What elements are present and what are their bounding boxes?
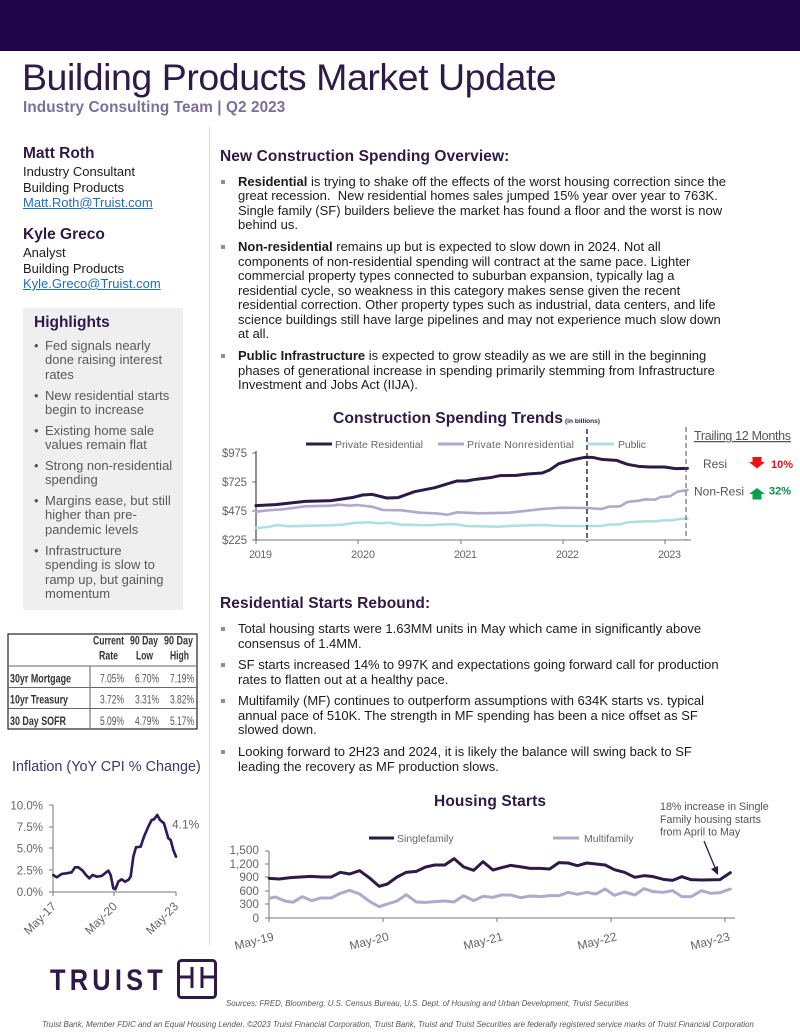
trailing 12 months callout: Trailing 12 Months bbox=[694, 429, 791, 443]
highlights list: Infrastructure bbox=[45, 543, 122, 558]
callout: 18% increase bbox=[660, 801, 769, 838]
highlights list: values remain flat bbox=[45, 437, 147, 452]
housing starts chart: 900 bbox=[239, 870, 259, 884]
logo wordmark: TRUIST bbox=[50, 964, 167, 997]
text: non-residential bullet: Non-residential remains up but is expected to slow down in 2024. Not all bbox=[238, 239, 661, 254]
text: multifamily bbox=[221, 693, 704, 737]
rates table: 10yr Treasury bbox=[10, 692, 68, 706]
rates table: 30yr Mortgage bbox=[10, 672, 71, 686]
trailing 12 months callout bbox=[694, 429, 793, 500]
highlights list: ramp up, but gaining bbox=[45, 572, 164, 587]
chart title: (in billions) bbox=[565, 419, 600, 425]
text: residential bullet bbox=[221, 174, 726, 232]
legend: Public bbox=[618, 439, 646, 451]
section heading: new construction spending: New Construction Spending Overview: bbox=[220, 148, 509, 165]
highlights list: done raising interest bbox=[45, 352, 162, 367]
rates table: 3.82% bbox=[170, 692, 194, 706]
inflation line chart: 7.5% bbox=[17, 822, 43, 834]
highlights list: • bbox=[34, 493, 39, 508]
trailing 12 months callout: Non-Resi bbox=[694, 484, 744, 498]
housing starts chart: 0 bbox=[252, 911, 259, 925]
trailing 12 months callout: 32% bbox=[769, 486, 791, 498]
chart title: Housing Starts bbox=[434, 793, 546, 810]
rates table: 30 Day SOFR bbox=[10, 714, 66, 728]
construction spending chart: $225 bbox=[222, 535, 247, 547]
panel: highlights bbox=[23, 308, 183, 610]
chart title: Construction Spending Trends bbox=[333, 410, 563, 427]
housing starts chart: May-21 bbox=[462, 929, 504, 953]
contact: Kyle Greco: Building Products bbox=[23, 260, 124, 276]
highlights list bbox=[34, 338, 172, 601]
icon: Truist mark bbox=[178, 960, 216, 998]
highlights list: New residential starts bbox=[45, 388, 169, 402]
rates table: 6.70% bbox=[135, 672, 159, 686]
highlights list: momentum bbox=[45, 586, 110, 601]
rates table: 90 Day bbox=[130, 634, 158, 648]
text: looking forward bbox=[221, 744, 692, 774]
contact: Matt Roth: Industry Consultant bbox=[23, 164, 135, 178]
highlights heading: Highlights bbox=[34, 314, 110, 331]
rates table: Low bbox=[136, 648, 153, 662]
highlights list: spending bbox=[45, 472, 98, 487]
text: public infrastructure bullet: Public Infrastructure is expected to grow steadily as we are still in the beginning bbox=[238, 348, 706, 363]
construction spending chart bbox=[222, 410, 691, 561]
inflation line chart: 4.1% bbox=[172, 818, 200, 832]
legal footer: Truist Bank, Member FDIC and an Equal Housing Lender. ©2023 Truist Financial Corporation, Truist Bank, Truist and Truist Securities are federally registered service marks of Truist Financial Corporation bbox=[42, 1020, 754, 1029]
contact: Matt Roth: Building Products bbox=[23, 180, 124, 194]
legend: Multifamily bbox=[584, 833, 634, 845]
callout: 18% increase: from April to May bbox=[660, 826, 741, 838]
legend: Private Residential bbox=[335, 439, 423, 451]
top banner bbox=[0, 0, 800, 51]
sources note: Sources: FRED, Bloomberg, U.S. Census Bureau, U.S. Dept. of Housing and Urban Development, Truist Securities bbox=[226, 999, 628, 1008]
highlights list: begin to increase bbox=[45, 402, 144, 417]
housing starts chart: 1,500 bbox=[229, 843, 259, 857]
text: multifamily: slowed down. bbox=[238, 722, 317, 737]
construction spending chart: 2021 bbox=[454, 549, 477, 561]
contact: Matt Roth: Matt Roth bbox=[23, 145, 94, 162]
series bbox=[256, 457, 687, 528]
text: total housing starts: Total housing starts were 1.63MM units in May which came in significantly above bbox=[238, 621, 701, 636]
text: looking forward: Looking forward to 2H23 and 2024, it is likely the balance will swing back to SF bbox=[238, 744, 692, 759]
text: total housing starts: consensus of 1.4MM. bbox=[238, 636, 362, 650]
text: non-residential bullet: residential cycle, so weakness in this category makes sense given the recent bbox=[238, 282, 680, 298]
text: residential bullet: Single family (SF) builders believe the market has found a floor and the worst is now bbox=[238, 202, 722, 218]
legend: Singlefamily bbox=[397, 833, 454, 845]
construction spending chart: 2023 bbox=[658, 549, 681, 561]
text: non-residential bullet: residential correction. Other property types such as industrial, data centers, and life bbox=[238, 297, 716, 312]
trailing 12 months callout: 10% bbox=[771, 459, 793, 471]
highlights list: Fed signals nearly bbox=[45, 338, 150, 353]
highlights list: pandemic levels bbox=[45, 522, 138, 537]
inflation line chart: 2.5% bbox=[17, 866, 43, 878]
highlights list: • bbox=[34, 422, 39, 438]
icon: green up arrow bbox=[749, 488, 765, 500]
inflation line chart bbox=[10, 800, 200, 937]
construction spending chart: 2020 bbox=[351, 549, 375, 561]
arrow bbox=[704, 841, 718, 875]
icon: red down arrow bbox=[749, 457, 765, 468]
rates table: 3.31% bbox=[135, 692, 159, 706]
highlights list: Existing home sale bbox=[45, 422, 154, 438]
construction spending chart: 2019 bbox=[249, 549, 272, 561]
rates table bbox=[7, 633, 198, 730]
highlights list: rates bbox=[45, 367, 74, 382]
subtitle: Industry Consulting Team | Q2 2023 bbox=[23, 99, 285, 116]
highlights list: Margins ease, but still bbox=[45, 493, 171, 508]
column divider bbox=[209, 127, 210, 945]
rates table: Rate bbox=[99, 648, 118, 662]
text: multifamily: annual pace of 510K. The strength in MF spending has been a nice offset as SF bbox=[238, 708, 698, 722]
housing starts chart: May-22 bbox=[576, 929, 618, 953]
text: residential bullet: Residential is trying to shake off the effects of the worst housing correction since the bbox=[238, 174, 726, 188]
highlights list: • bbox=[34, 338, 39, 353]
rates table: 5.17% bbox=[170, 714, 194, 728]
rates table: 3.72% bbox=[100, 692, 124, 706]
highlights list: • bbox=[34, 543, 39, 558]
housing starts chart: May-20 bbox=[348, 929, 390, 953]
text: looking forward: leading the recovery as MF production slows. bbox=[238, 758, 499, 774]
rates table: 90 Day bbox=[164, 634, 193, 648]
text: multifamily: Multifamily (MF) continues to outperform assumptions with 634K starts vs. typical bbox=[238, 693, 704, 708]
legend bbox=[369, 833, 634, 845]
inflation chart title: Inflation (YoY CPI % Change) bbox=[12, 759, 201, 775]
text: SF starts bbox=[221, 657, 719, 686]
contact: Matt Roth: Matt.Roth@Truist.com bbox=[23, 195, 153, 210]
construction spending chart: $475 bbox=[222, 506, 247, 518]
section heading: residential starts: Residential Starts Rebound: bbox=[220, 595, 430, 612]
inflation line chart: May-17 bbox=[21, 899, 59, 937]
housing starts chart: May-23 bbox=[689, 929, 731, 953]
inflation line chart: 5.0% bbox=[17, 844, 43, 856]
contact: Kyle Greco: Kyle Greco bbox=[23, 226, 105, 243]
text: total housing starts bbox=[221, 621, 701, 650]
rates table: 7.05% bbox=[100, 672, 124, 686]
inflation line chart: May-20 bbox=[82, 899, 120, 937]
series bbox=[269, 859, 730, 907]
text: non-residential bullet: components of non-residential spending will contract at the same pace. Lighter bbox=[238, 254, 690, 268]
inflation line chart: 0.0% bbox=[17, 887, 43, 899]
inflation line chart: 10.0% bbox=[10, 800, 43, 812]
text: residential bullet: behind us. bbox=[238, 217, 298, 232]
callout: 18% increase: 18% increase in Single bbox=[660, 801, 769, 813]
highlights list: • bbox=[34, 388, 39, 402]
logo: Truist bbox=[50, 959, 217, 999]
contact: Kyle Greco: Kyle.Greco@Truist.com bbox=[23, 276, 161, 291]
housing starts chart: 600 bbox=[239, 884, 259, 898]
axes bbox=[252, 451, 691, 544]
trailing 12 months callout: Resi bbox=[703, 457, 727, 471]
callout: 18% increase: Family housing starts bbox=[660, 814, 761, 826]
contact: Kyle Greco bbox=[23, 226, 161, 291]
text: non-residential bullet: commercial property types connected to suburban expansion, typically lag a bbox=[238, 268, 674, 283]
text: non-residential bullet: at all. bbox=[238, 326, 269, 341]
housing starts chart: 1,200 bbox=[229, 857, 259, 871]
housing starts chart bbox=[229, 793, 769, 953]
construction spending chart: 2022 bbox=[556, 549, 579, 561]
highlights list: • bbox=[34, 458, 39, 473]
text: non-residential bullet: science buildings still have large pipelines and may not experience much slow down bbox=[238, 312, 721, 326]
rates table: 4.79% bbox=[135, 714, 159, 728]
construction spending chart: $725 bbox=[222, 477, 247, 489]
title: Building Products Market Update bbox=[22, 56, 556, 98]
text: SF starts: rates to flatten out at a healthy pace. bbox=[238, 672, 448, 686]
construction spending chart: $975 bbox=[222, 448, 247, 460]
axes bbox=[265, 851, 735, 922]
contact: Kyle Greco: Analyst bbox=[23, 244, 66, 260]
text: public infrastructure bullet bbox=[221, 348, 715, 392]
legend bbox=[306, 439, 646, 451]
inflation line chart: May-23 bbox=[143, 899, 181, 937]
rates table: 7.19% bbox=[170, 672, 194, 686]
housing starts chart: 300 bbox=[239, 897, 259, 911]
highlights list: Strong non-residential bbox=[45, 458, 172, 473]
legend: Private Nonresidential bbox=[467, 439, 574, 451]
text: SF starts: SF starts increased 14% to 997K and expectations going forward call for production bbox=[238, 657, 719, 672]
text: residential bullet: great recession. New residential homes sales jumped 15% year over year to 763K. bbox=[238, 188, 718, 203]
rates table: Current bbox=[93, 634, 124, 648]
contact: Matt Roth bbox=[23, 145, 153, 210]
text: non-residential bullet bbox=[221, 239, 721, 341]
highlights list: higher than pre- bbox=[45, 507, 137, 522]
rates table: High bbox=[170, 648, 189, 662]
text: public infrastructure bullet: Investment and Jobs Act (IIJA). bbox=[238, 377, 418, 392]
housing starts chart: May-19 bbox=[233, 929, 275, 953]
highlights list: spending is slow to bbox=[45, 557, 155, 572]
text: public infrastructure bullet: phases of generational increase in spending primarily stemming from Infrastructure bbox=[238, 362, 715, 378]
rates table: 5.09% bbox=[100, 714, 124, 728]
